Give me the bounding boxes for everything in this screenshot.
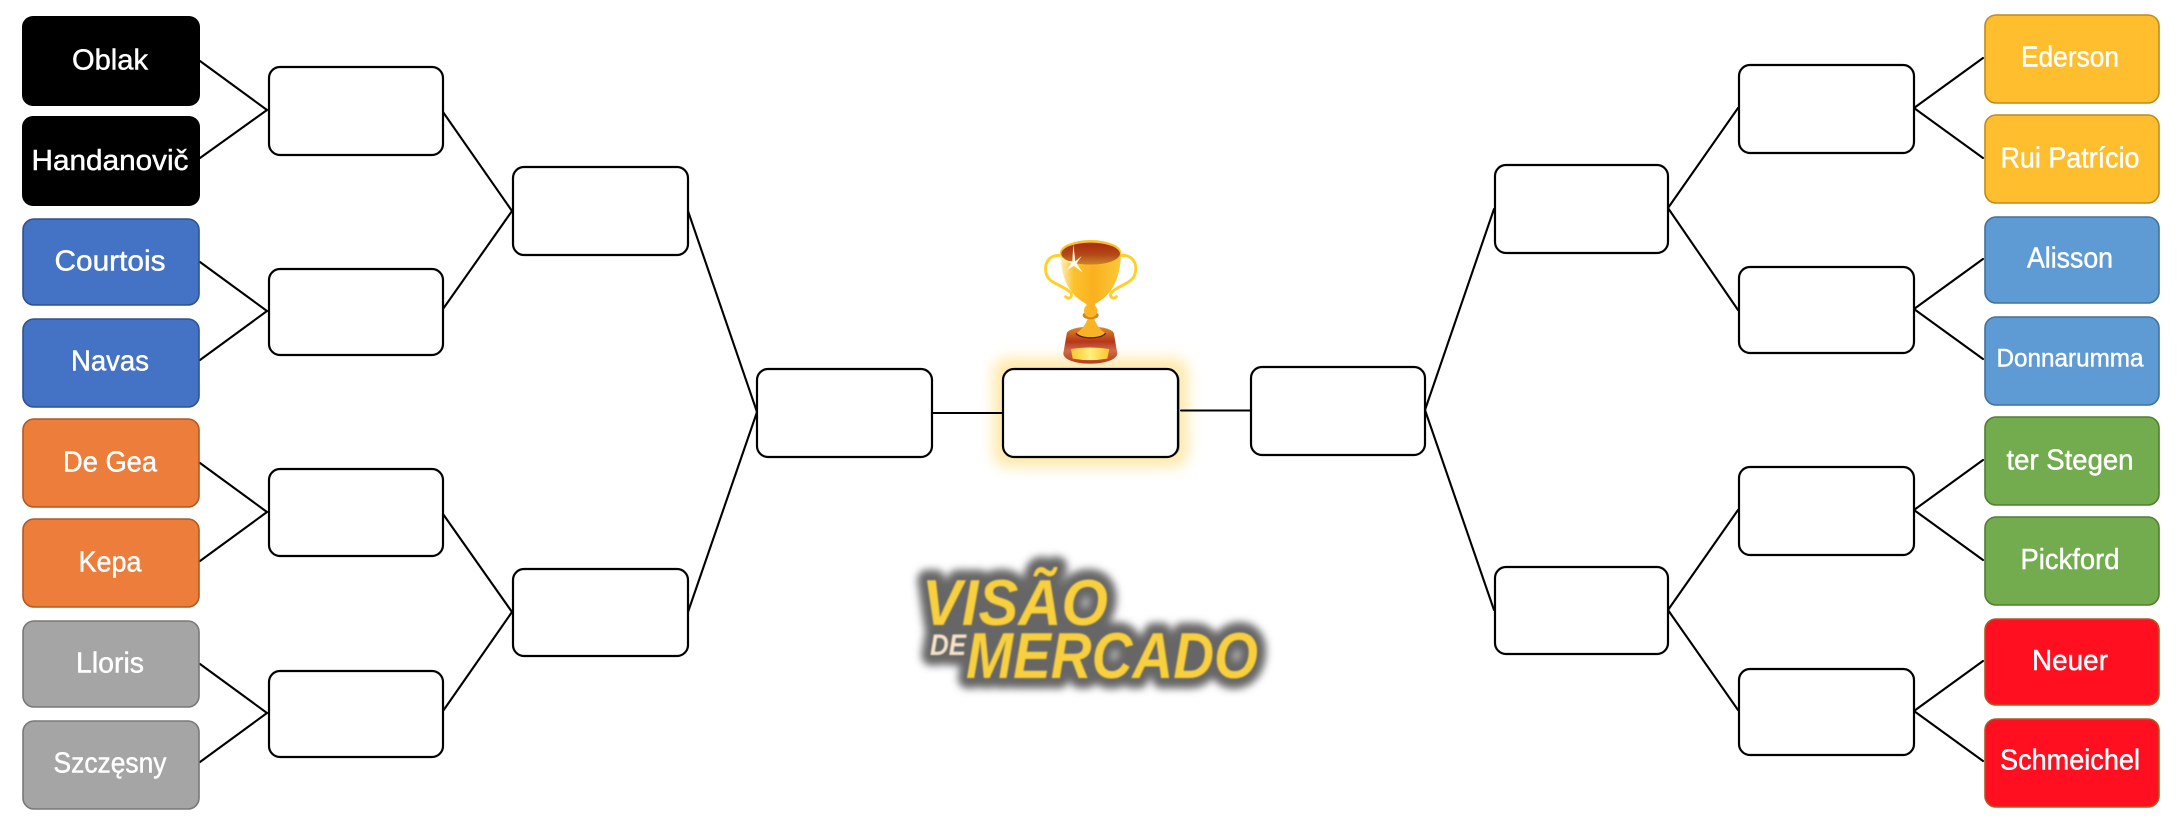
final slot glow <box>993 358 1188 467</box>
team: Navas <box>23 319 199 407</box>
team: Neuer <box>1985 619 2159 705</box>
team: Schmeichel: Schmeichel <box>2000 744 2140 776</box>
team: Oblak <box>22 16 200 106</box>
team: Ederson <box>1985 15 2159 103</box>
left round slots <box>269 67 932 757</box>
team: Szczęsny <box>23 721 199 809</box>
team: De Gea <box>23 419 199 507</box>
team: Oblak: Oblak <box>72 44 148 76</box>
team: Szczęsny: Szczęsny <box>54 748 167 780</box>
team: Kepa <box>23 519 199 607</box>
team: Donnarumma <box>1985 317 2159 405</box>
icon: golden trophy <box>1046 240 1136 364</box>
team: Alisson: Alisson <box>2027 243 2113 275</box>
team: Lloris: Lloris <box>76 648 144 680</box>
team: ter Stegen: ter Stegen <box>2006 444 2134 476</box>
team: Schmeichel <box>1985 719 2159 807</box>
logo halo: VISÃO <box>922 566 1108 639</box>
logo halo <box>922 566 1258 692</box>
team: Alisson <box>1985 217 2159 303</box>
team: Handanovič <box>22 116 200 206</box>
logo halo: MERCADO <box>966 619 1258 692</box>
team: Ederson: Ederson <box>2021 42 2119 74</box>
team: ter Stegen <box>1985 417 2159 505</box>
logo lettering: VISÃO <box>922 566 1108 639</box>
team: Rui Patrício: Rui Patrício <box>2000 142 2140 174</box>
logo lettering: MERCADO <box>966 619 1258 692</box>
team: Pickford <box>1985 517 2159 605</box>
panel: left team column <box>22 16 200 809</box>
team: De Gea: De Gea <box>63 447 158 479</box>
connector lines <box>200 58 1983 762</box>
team: Navas: Navas <box>71 346 149 378</box>
team: Lloris <box>23 621 199 707</box>
logo lettering: DE <box>930 629 967 662</box>
logo lettering <box>922 566 1258 692</box>
team: Kepa: Kepa <box>78 547 142 579</box>
team: Neuer: Neuer <box>2032 645 2108 677</box>
final slot <box>1003 369 1180 457</box>
panel: right team column <box>1985 15 2159 807</box>
team: Courtois <box>23 219 199 305</box>
logo: Visão de Mercado <box>922 566 1258 692</box>
team: Rui Patrício <box>1985 115 2159 203</box>
logo halo: DE <box>930 629 967 662</box>
team: Pickford: Pickford <box>2020 544 2120 576</box>
right round slots <box>1251 65 1914 755</box>
team: Courtois: Courtois <box>54 246 166 278</box>
team: Donnarumma: Donnarumma <box>1996 345 2144 373</box>
team: Handanovič: Handanovič <box>32 145 188 177</box>
